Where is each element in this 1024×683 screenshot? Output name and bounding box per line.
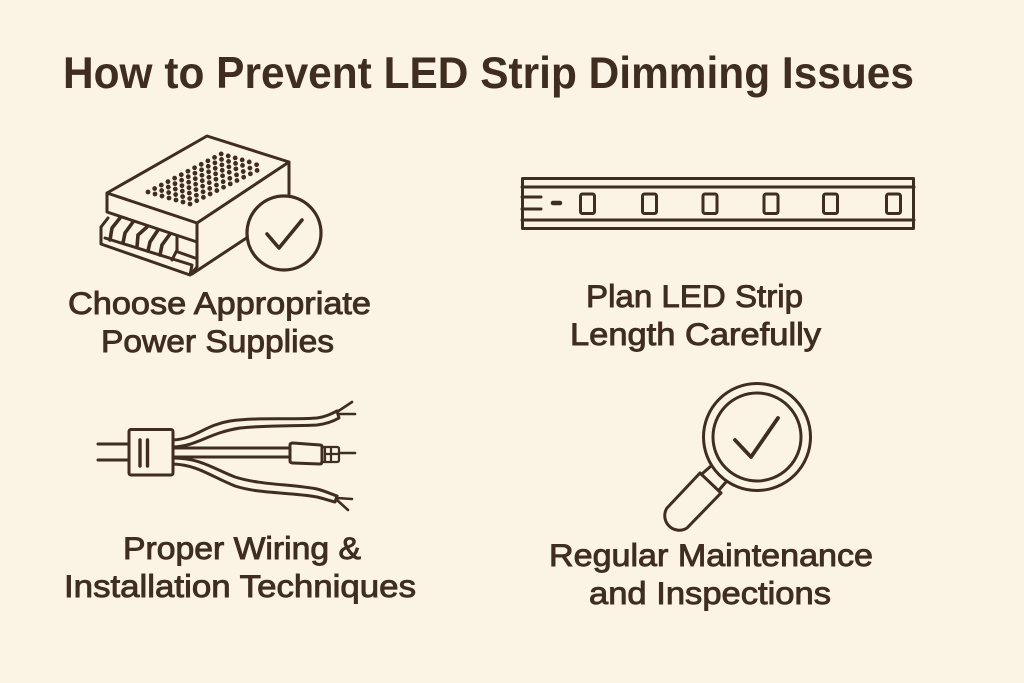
label: regular maintenance and inspections: and Inspections	[589, 575, 831, 611]
label: proper wiring and installation techniques: Installation Techniques	[64, 568, 416, 604]
label: choose appropriate power supplies: Choose Appropriate	[68, 285, 371, 321]
label: proper wiring and installation techniques: Proper Wiring &	[123, 530, 361, 566]
label: plan led strip length carefully: Length Carefully	[570, 316, 821, 352]
label: regular maintenance and inspections: Regular Maintenance	[549, 537, 873, 573]
label: choose appropriate power supplies: Power Supplies	[101, 323, 334, 359]
icon: wiring connector	[98, 402, 355, 510]
title: How to Prevent LED Strip Dimming Issues	[63, 49, 914, 98]
panel: wiring	[64, 402, 416, 604]
label: choose appropriate power supplies	[68, 285, 371, 359]
icon: led strip	[522, 178, 914, 228]
icon: magnifying glass with check	[665, 384, 810, 530]
panel: power supplies	[68, 136, 371, 359]
label: plan led strip length carefully	[570, 278, 821, 352]
label: proper wiring and installation techniques	[64, 530, 416, 604]
label: regular maintenance and inspections	[549, 537, 873, 611]
icon: power supply with check	[101, 136, 321, 275]
panel: led strip length	[522, 178, 914, 352]
label: plan led strip length carefully: Plan LED Strip	[586, 278, 803, 314]
panel: maintenance	[549, 384, 873, 611]
